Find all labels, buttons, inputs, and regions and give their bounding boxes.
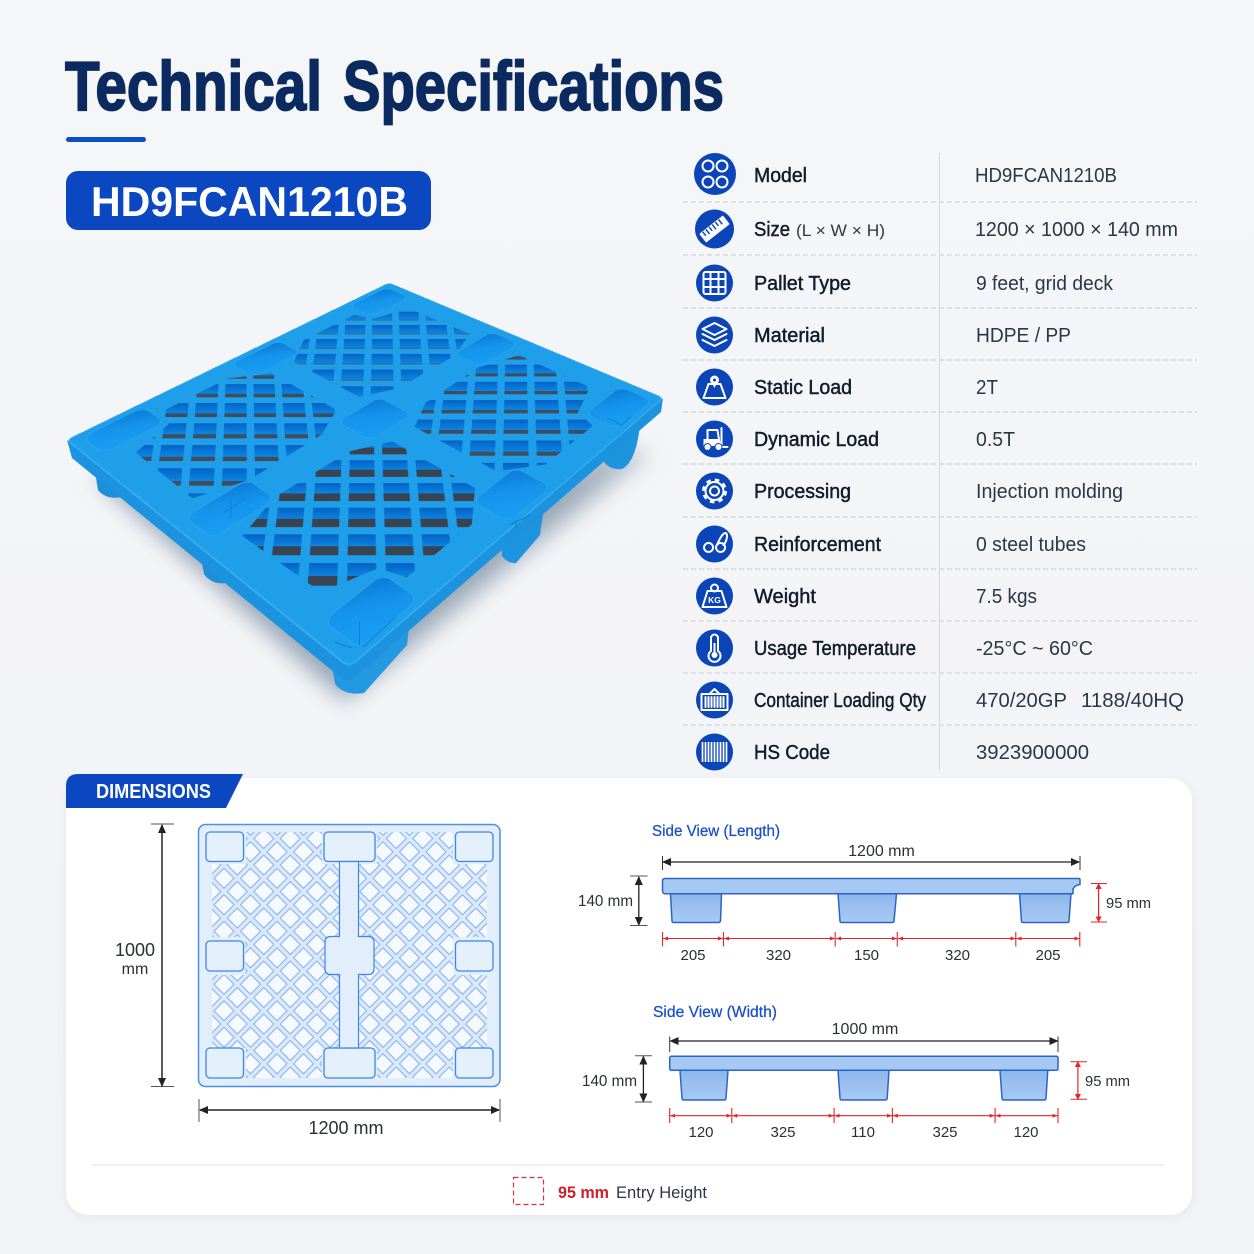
row: size: (L × W × H): [796, 221, 885, 240]
row: dynamic load: 0.5T: [976, 429, 1015, 451]
row: hs code: [696, 734, 1089, 770]
side view: width: 325: [770, 1124, 796, 1141]
side view: width: Side View (Width): [653, 1004, 777, 1021]
row: model: Model: [754, 165, 807, 187]
row: size: 1200 × 1000 × 140 mm: [975, 219, 1178, 241]
title: [64, 47, 724, 126]
panel: pallet photo: [67, 284, 663, 710]
legend: entry height: Entry Height: [616, 1183, 707, 1202]
row: processing: Processing: [754, 481, 851, 503]
side view: length: Side View (Length): [652, 823, 780, 840]
top view drawing: [198, 824, 500, 1086]
title: Specifications: [343, 47, 724, 125]
row: processing: [696, 472, 1123, 510]
legend: entry height: [514, 1178, 707, 1204]
icon: gear: [696, 472, 733, 510]
side view: length: 320: [766, 947, 791, 964]
row: size: Size: [754, 219, 790, 241]
dimensions tab: DIMENSIONS: [96, 781, 211, 803]
icon: layers: [696, 316, 733, 354]
side view: width: 120: [1013, 1124, 1039, 1141]
row: dynamic load: [696, 420, 1015, 458]
dimension arrow: 1200 mm: [199, 1099, 500, 1138]
row: reinforcement: [696, 526, 1086, 562]
row: weight: 7.5 kgs: [976, 586, 1037, 608]
icon: model: [694, 153, 736, 195]
row: weight: [696, 578, 1037, 614]
dimensions tab: [66, 774, 243, 808]
dimension arrow: 1000 mm: 1000: [115, 940, 155, 960]
row: material: HDPE / PP: [976, 325, 1071, 347]
side view: width: 110: [851, 1124, 875, 1141]
row: usage temperature: -25°C ~ 60°C: [976, 638, 1093, 660]
row: hs code: 3923900000: [976, 742, 1089, 764]
icon: ruler: [695, 210, 734, 248]
icon: container: [696, 682, 733, 718]
row: static load: [696, 368, 998, 406]
side view: length: 320: [945, 947, 970, 964]
side view: width: 95 mm: [1085, 1073, 1130, 1090]
side view: length: 95 mm: [1106, 895, 1151, 912]
row: model: HD9FCAN1210B: [975, 165, 1117, 187]
side view: width: 120: [688, 1124, 714, 1141]
row: usage temperature: [696, 630, 1093, 666]
title: Technical: [65, 47, 322, 125]
row: hs code: HS Code: [754, 742, 830, 764]
row: static load: Static Load: [754, 377, 852, 399]
title underline: [66, 137, 146, 142]
row: pallet type: Pallet Type: [754, 273, 851, 295]
side view: length: 150: [854, 947, 879, 964]
row: size: [695, 210, 1178, 248]
row: model: [694, 153, 1117, 195]
row: container loading qty: Container Loading Qty: [754, 690, 926, 712]
row: material: [696, 316, 1071, 354]
icon: kg weight: KG: [708, 595, 721, 605]
icon: barcode: [696, 734, 733, 770]
icon: kg weight: [696, 578, 733, 614]
side view: width: [582, 1004, 1130, 1141]
side view: width: 1000 mm: [832, 1021, 898, 1038]
icon: reinforcement: [696, 526, 733, 562]
icon: grid: [696, 264, 733, 302]
icon: thermometer: [696, 630, 733, 666]
row: container loading qty: 470/20GP: [976, 690, 1067, 712]
row: container loading qty: [696, 682, 1184, 718]
side view: width: 140 mm: [582, 1073, 637, 1090]
row: pallet type: 9 feet, grid deck: [976, 273, 1114, 295]
row: reinforcement: 0 steel tubes: [976, 534, 1086, 556]
row: processing: Injection molding: [976, 481, 1123, 503]
row: static load: 2T: [976, 377, 998, 399]
legend: entry height: 95 mm: [558, 1183, 609, 1202]
row: dynamic load: Dynamic Load: [754, 429, 879, 451]
model badge: HD9FCAN1210B: [91, 178, 408, 225]
dimension arrow: 1000 mm: mm: [122, 961, 148, 978]
icon: static load: [696, 368, 733, 406]
row: usage temperature: Usage Temperature: [754, 638, 916, 660]
side view: length: 205: [1035, 947, 1061, 964]
panel: dimensions card: [66, 778, 1192, 1215]
icon: forklift: [696, 420, 733, 458]
side view: length: 205: [680, 947, 706, 964]
dimension arrow: 1000 mm: [115, 824, 174, 1086]
panel: specification table: [683, 153, 1197, 770]
dimension arrow: 1200 mm: 1200 mm: [308, 1118, 384, 1138]
row: weight: Weight: [754, 586, 816, 608]
side view: length: 140 mm: [578, 893, 633, 910]
side view: width: 325: [932, 1124, 958, 1141]
side view: length: 1200 mm: [848, 843, 915, 860]
row: material: Material: [754, 325, 825, 347]
side view: length: [578, 823, 1151, 964]
row: reinforcement: Reinforcement: [754, 534, 881, 556]
row: container loading qty: 1188/40HQ: [1081, 690, 1184, 712]
row: pallet type: [696, 264, 1114, 302]
